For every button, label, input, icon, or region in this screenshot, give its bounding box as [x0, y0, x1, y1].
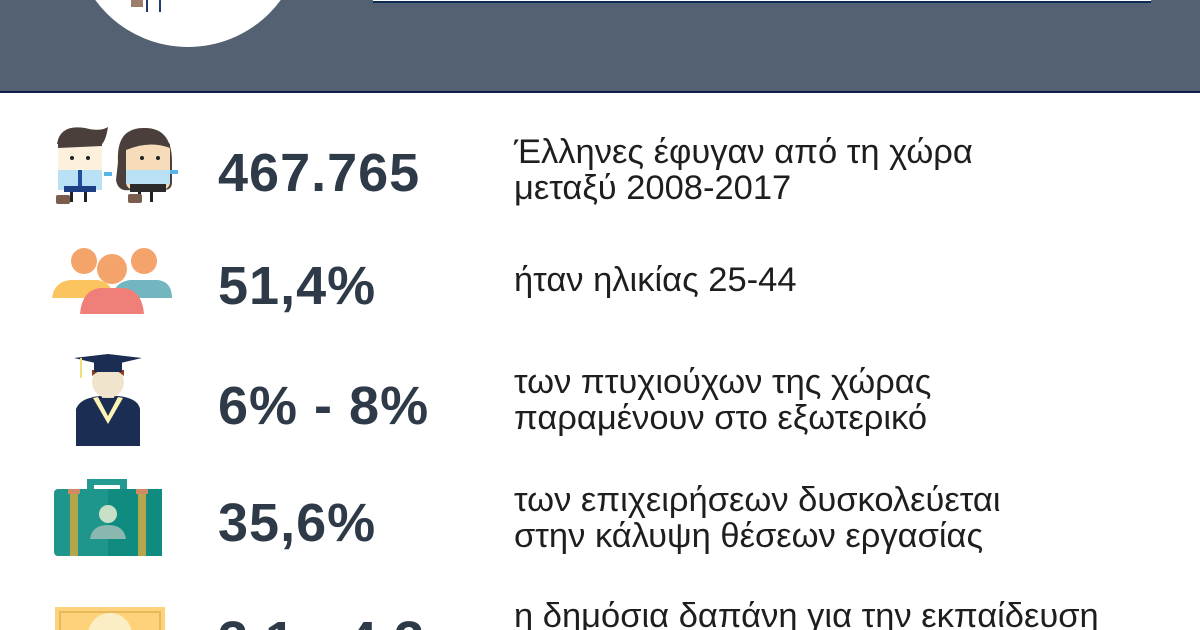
header circle with figures [73, 0, 303, 47]
stat 2 description: ήταν ηλικίας 25-44 [514, 261, 797, 299]
stat 3 number: 6% - 8% [218, 376, 429, 436]
header title bar [373, 0, 1151, 3]
header band [0, 0, 1200, 93]
stat 3 description: παραμένουν στο εξωτερικό [514, 399, 927, 437]
icon: graduate [74, 354, 142, 446]
stat 4 description: των επιχειρήσεων δυσκολεύεται [514, 481, 1001, 519]
stat 1 description: μεταξύ 2008-2017 [514, 169, 791, 207]
stat 1 description [514, 133, 973, 207]
stat 4 description [514, 481, 1001, 555]
stat 3 description: των πτυχιούχων της χώρας [514, 363, 931, 401]
icon: man and woman [56, 127, 178, 204]
icon: briefcase [54, 479, 162, 556]
icon: group of people [52, 248, 172, 314]
icon: money bill [55, 607, 165, 630]
stat 4 description: στην κάλυψη θέσεων εργασίας [514, 517, 983, 555]
stat 3 description [514, 363, 931, 437]
stat 1 number: 467.765 [218, 143, 420, 203]
stat 2 number: 51,4% [218, 256, 376, 316]
stat 4 number: 35,6% [218, 493, 376, 553]
stat 1 description: Έλληνες έφυγαν από τη χώρα [514, 133, 973, 171]
